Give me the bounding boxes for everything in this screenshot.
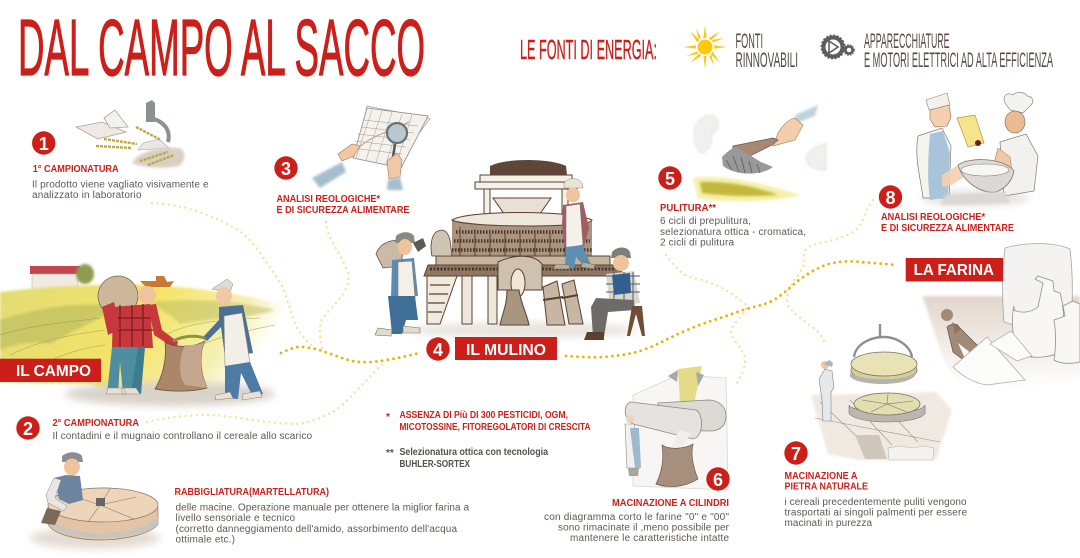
illustration: flour sacks, scoop and piles [922, 244, 1080, 389]
note: optical selection: BUHLER-SORTEX [400, 459, 470, 470]
description [176, 503, 469, 546]
panel: millstone dressing [30, 452, 469, 549]
heading: PULITURA** [660, 203, 716, 214]
illustration: millstones and worker on platform [811, 324, 952, 460]
note: no pesticides: MICOTOSSINE, FITOREGOLATORI DI CRESCITA [400, 422, 590, 433]
illustration: lab book, microscope, wheat [76, 100, 184, 168]
description: 6 cicli di prepulitura, [660, 216, 751, 227]
heading [276, 194, 410, 216]
illustration: man with sack, left [375, 232, 426, 336]
panel: la farina [906, 244, 1080, 389]
badge 6: 6 [713, 470, 723, 490]
description: selezionatura ottica - cromatica, [660, 227, 806, 238]
heading: ANALISI REOLOGICHE* [881, 212, 985, 223]
illustration: seated man [584, 248, 645, 340]
note: optical selection: Selezionatura ottica con tecnologia [400, 447, 548, 458]
heading: RABBIGLIATURA(MARTELLATURA) [174, 487, 329, 498]
badge 1 [32, 131, 55, 155]
energy sources legend [520, 25, 1053, 72]
label: la farina [906, 258, 1003, 282]
panel: step 5 cleaning [658, 105, 826, 248]
badge 3: 3 [281, 159, 291, 179]
illustration: document with magnifier and hands [312, 106, 431, 190]
description: ottimale etc.) [176, 535, 235, 546]
badge 3 [274, 156, 298, 180]
badge 7: 7 [791, 444, 801, 464]
panel: il mulino [375, 160, 645, 361]
illustration: miller and chef with certificate and bowl [917, 92, 1038, 206]
panel: step 1 sampling [32, 100, 209, 201]
heading [881, 212, 1014, 234]
badge 8: 8 [885, 188, 896, 208]
illustration: grain sack [155, 336, 207, 391]
heading: E DI SICUREZZA ALIMENTARE [881, 223, 1014, 234]
description [32, 180, 209, 201]
energy sources legend: LE FONTI DI ENERGIA: [520, 34, 657, 65]
heading: MACINAZIONE A [784, 471, 858, 482]
badge 8 [879, 185, 902, 209]
badge 2: 2 [23, 419, 33, 439]
illustration: field with farmhouse [0, 264, 285, 406]
description: analizzato in laboratorio [32, 190, 142, 201]
badge 5 [658, 166, 682, 190]
panel: step 3 analysis [274, 106, 431, 216]
description: con diagramma corto le farine "0" e "00" [544, 512, 729, 523]
text: DAL CAMPO AL SACCO [18, 3, 425, 92]
description: livello sensoriale e tecnico [176, 513, 295, 524]
badge 5: 5 [665, 169, 675, 189]
badge 2 [16, 416, 40, 440]
energy sources legend: RINNOVABILI [736, 49, 798, 72]
energy sources legend: APPARECCHIATURE [864, 30, 950, 53]
description: sono rimacinate il ,meno possibile per [558, 522, 730, 534]
badge 6 [706, 467, 730, 491]
label: il mulino [455, 337, 557, 360]
illustration: rollers and sack [625, 366, 728, 490]
label: la farina: LA FARINA [914, 262, 994, 279]
illustration: farmer with sack [98, 276, 178, 394]
description: trasportati ai singoli palmenti per essere [784, 508, 967, 519]
panel: footnotes [386, 410, 590, 470]
note: optical selection [386, 447, 548, 470]
energy sources legend: FONTI [736, 30, 763, 53]
description [544, 512, 730, 544]
heading: PIETRA NATURALE [784, 482, 868, 492]
dotted connector lines [147, 200, 897, 424]
description: 2 cicli di pulitura [660, 238, 734, 248]
label: il mulino: IL MULINO [466, 342, 546, 359]
illustration: mill machine [410, 160, 640, 338]
description: Il contadini e il mugnaio controllano il cereale allo scarico [52, 431, 312, 442]
note: optical selection: ** [386, 448, 394, 459]
note: no pesticides [386, 410, 590, 433]
note: no pesticides: ASSENZA DI Più DI 300 PESTICIDI, OGM, [400, 410, 568, 421]
panel: step 8 analysis [879, 92, 1038, 234]
illustration: brush and grain [693, 105, 826, 201]
label: il campo [0, 359, 101, 382]
heading [784, 471, 868, 492]
badge 4 [426, 337, 450, 361]
illustration: man dressing a millstone [30, 452, 160, 549]
panel: il campo [0, 264, 285, 406]
badge 7 [784, 441, 808, 465]
description: (corretto danneggiamento dell'amido, assorbimento dell'acqua [176, 524, 457, 535]
panel: step 6 roller milling [544, 366, 730, 544]
description: mantenere le caratteristiche intatte [570, 533, 729, 544]
icon: sun [683, 25, 727, 69]
description [784, 497, 967, 529]
description: i cereali precedentemente puliti vengono [784, 497, 967, 508]
panel: step 2 sampling [16, 416, 312, 442]
panel: step 7 stone milling [784, 324, 967, 529]
heading: 2° CAMPIONATURA [52, 418, 139, 429]
illustration: standing miller [553, 178, 595, 269]
illustration: miller [204, 279, 263, 400]
description [660, 216, 806, 248]
badge 4: 4 [433, 340, 443, 360]
description: delle macine. Operazione manuale per ottenere la miglior farina a [176, 503, 469, 514]
heading: ANALISI REOLOGICHE* [276, 194, 380, 205]
description: Il prodotto viene vagliato visivamente e [32, 180, 209, 191]
note: no pesticides: * [386, 412, 390, 423]
heading: MACINAZIONE A CILINDRI [612, 498, 729, 509]
label: il campo: IL CAMPO [16, 363, 91, 380]
heading: 1° CAMPIONATURA [33, 164, 119, 175]
description: macinati in purezza [784, 518, 872, 529]
heading: E DI SICUREZZA ALIMENTARE [276, 205, 410, 216]
icon: gears [822, 36, 854, 58]
badge 1: 1 [39, 134, 49, 154]
